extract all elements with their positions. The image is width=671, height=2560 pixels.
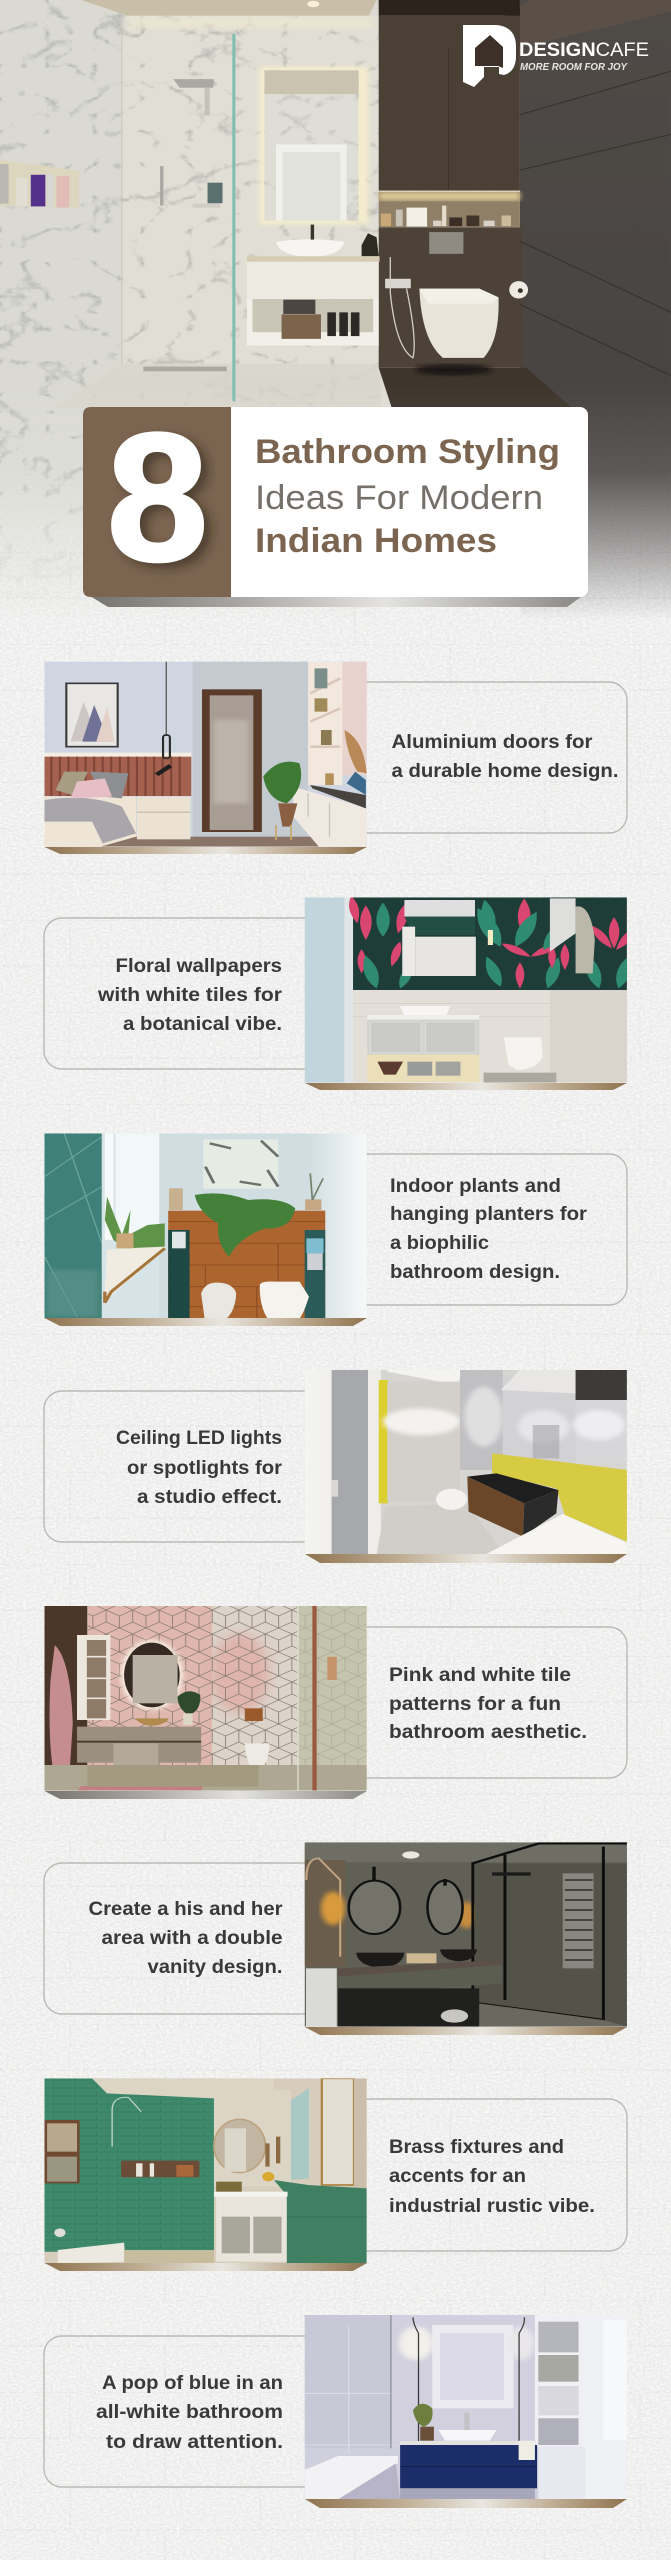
photo: floral wallpaper bathroom bbox=[305, 895, 640, 1083]
photo shelf bbox=[305, 2499, 627, 2508]
caption bbox=[392, 732, 618, 782]
dark walls bbox=[379, 0, 671, 620]
shower glass, head and shelf bbox=[143, 34, 235, 401]
illuminated mirror bbox=[259, 66, 368, 225]
caption bbox=[88, 1899, 283, 1978]
photo: biophilic bathroom bbox=[45, 1133, 367, 1318]
title line 1: Bathroom Styling bbox=[255, 433, 560, 471]
photo: green tile bathroom bbox=[45, 2078, 367, 2263]
caption: all-white bathroom bbox=[96, 2402, 283, 2423]
photo shelf bbox=[305, 2027, 627, 2035]
caption bbox=[116, 1428, 283, 1508]
caption: Floral wallpapers bbox=[116, 956, 282, 977]
icon: logo mark bbox=[463, 25, 516, 87]
photo shelf bbox=[44, 1791, 367, 1799]
caption: to draw attention. bbox=[106, 2432, 283, 2453]
caption: bathroom aesthetic. bbox=[389, 1722, 587, 1743]
photo: double vanity bathroom bbox=[305, 1842, 627, 2027]
caption: Brass fixtures and bbox=[389, 2137, 564, 2158]
idea 4: ceiling LED lights bbox=[44, 1370, 627, 1563]
caption: Aluminium doors for bbox=[392, 732, 593, 753]
ceiling and cove light bbox=[81, 0, 377, 28]
idea 6: double vanity bbox=[44, 1842, 627, 2035]
title line 3: Indian Homes bbox=[255, 522, 497, 560]
idea 2: floral wallpaper bbox=[44, 895, 640, 1090]
photo: bedroom with aluminium door bbox=[45, 662, 367, 847]
caption: a studio effect. bbox=[137, 1487, 282, 1508]
caption: vanity design. bbox=[148, 1957, 282, 1978]
photo shelf bbox=[44, 1318, 367, 1326]
caption: with white tiles for bbox=[97, 985, 283, 1006]
caption: patterns for a fun bbox=[389, 1694, 561, 1715]
title line 2: Ideas For Modern bbox=[255, 479, 543, 517]
caption: accents for an bbox=[389, 2166, 526, 2187]
caption: area with a double bbox=[102, 1928, 282, 1949]
caption: Ceiling LED lights bbox=[116, 1428, 282, 1449]
vanity with basin bbox=[247, 225, 380, 346]
caption bbox=[96, 2373, 283, 2453]
logo: Design Cafe bbox=[463, 25, 649, 87]
caption: Pink and white tile bbox=[389, 1665, 571, 1686]
caption bbox=[390, 1176, 588, 1283]
hero photo: bathroom bbox=[0, 0, 671, 620]
logo tagline: MORE ROOM FOR JOY bbox=[520, 61, 628, 73]
photo shelf bbox=[305, 1083, 627, 1090]
logo wordmark: DESIGNCAFE bbox=[519, 39, 649, 61]
wall niche with bottles bbox=[0, 160, 79, 208]
photo: white bathroom with blue vanity bbox=[305, 2315, 627, 2499]
big number 8: 8 bbox=[107, 395, 208, 599]
idea 1: aluminium doors bbox=[44, 662, 627, 854]
lit niche with toiletries bbox=[379, 192, 520, 227]
idea 5: pink and white tile bbox=[44, 1606, 627, 1799]
marble walls bbox=[0, 0, 392, 620]
caption bbox=[97, 956, 283, 1035]
caption bbox=[389, 1665, 587, 1743]
caption: a durable home design. bbox=[392, 761, 618, 782]
wall hung toilet bbox=[385, 232, 528, 358]
number panel bbox=[83, 407, 231, 597]
caption: Create a his and her bbox=[88, 1899, 283, 1920]
photo: pink hex tile bathroom bbox=[45, 1606, 367, 1791]
photo shelf bbox=[305, 1554, 627, 1563]
caption: hanging planters for bbox=[390, 1204, 588, 1225]
caption bbox=[389, 2137, 595, 2217]
caption: Indoor plants and bbox=[390, 1176, 561, 1197]
idea 8: pop of blue bbox=[44, 2315, 627, 2508]
photo: studio-lit bathroom bbox=[305, 1370, 627, 1554]
idea 3: indoor plants bbox=[44, 1133, 627, 1326]
photo shelf bbox=[44, 2263, 367, 2271]
caption: bathroom design. bbox=[390, 1262, 560, 1283]
caption: or spotlights for bbox=[127, 1458, 283, 1479]
caption: a biophilic bbox=[390, 1233, 489, 1254]
caption: A pop of blue in an bbox=[102, 2373, 283, 2394]
caption: a botanical vibe. bbox=[123, 1014, 282, 1035]
idea 7: brass fixtures bbox=[44, 2078, 627, 2271]
title card bbox=[83, 395, 588, 607]
photo shelf bbox=[44, 847, 367, 854]
caption: industrial rustic vibe. bbox=[389, 2196, 595, 2217]
